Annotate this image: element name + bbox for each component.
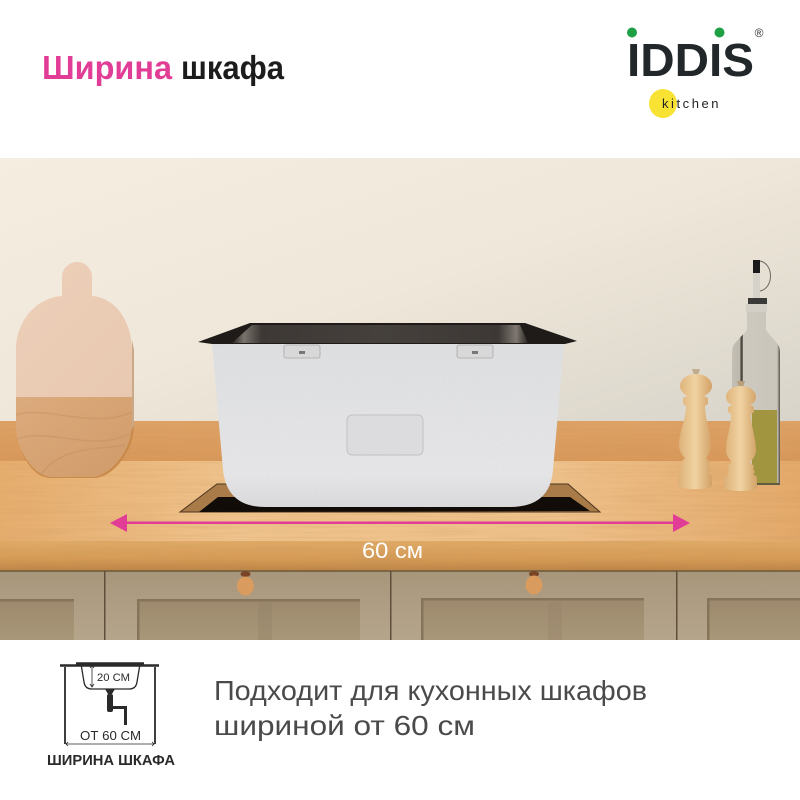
sink bowl	[212, 344, 564, 507]
description	[214, 675, 647, 741]
title: Ширина	[42, 49, 173, 86]
depth arrow	[90, 665, 94, 687]
pepper mill small	[724, 381, 757, 491]
logo: IDDIS kitchen: IDDIS	[627, 34, 754, 86]
logo: IDDIS kitchen: ®	[755, 26, 764, 40]
counter cutout	[180, 484, 600, 512]
drain trap	[105, 689, 126, 725]
counter surface	[0, 461, 800, 542]
logo: IDDIS kitchen	[627, 26, 764, 118]
pepper mill large	[678, 369, 712, 489]
counter back strip	[0, 421, 800, 462]
cabinet knobs	[237, 571, 542, 596]
drain panel	[347, 415, 423, 455]
oil bottle	[732, 260, 780, 485]
width dimension	[66, 742, 154, 746]
description: шириной от 60 см	[214, 710, 475, 741]
kitchen scene	[0, 158, 800, 640]
sink rim	[198, 323, 577, 344]
width label: 60 см	[362, 538, 423, 563]
logo: IDDIS kitchen: kitchen	[662, 96, 720, 111]
countertop	[60, 664, 159, 666]
cabinet walls	[65, 667, 155, 744]
mounting clip left	[284, 345, 320, 358]
diagram icon: sink in cabinet	[47, 664, 175, 769]
bowl surface texture	[212, 344, 564, 507]
cabinet width caption: ШИРИНА ШКАФА	[47, 752, 175, 769]
width value: ОТ 60 СМ	[80, 728, 141, 743]
mounting clip right	[457, 345, 493, 358]
title	[42, 49, 285, 86]
title: шкафа	[181, 49, 285, 86]
sink inner wall	[232, 325, 528, 343]
counter front edge	[0, 541, 800, 571]
sink profile	[81, 664, 140, 689]
depth label: 20 СМ	[97, 672, 130, 684]
wall	[0, 158, 800, 422]
wood grain	[0, 421, 800, 571]
cabinet doors	[0, 570, 800, 640]
sink	[198, 323, 577, 507]
width arrow	[110, 514, 690, 532]
description: Подходит для кухонных шкафов	[214, 675, 647, 706]
cutting board	[16, 262, 134, 478]
